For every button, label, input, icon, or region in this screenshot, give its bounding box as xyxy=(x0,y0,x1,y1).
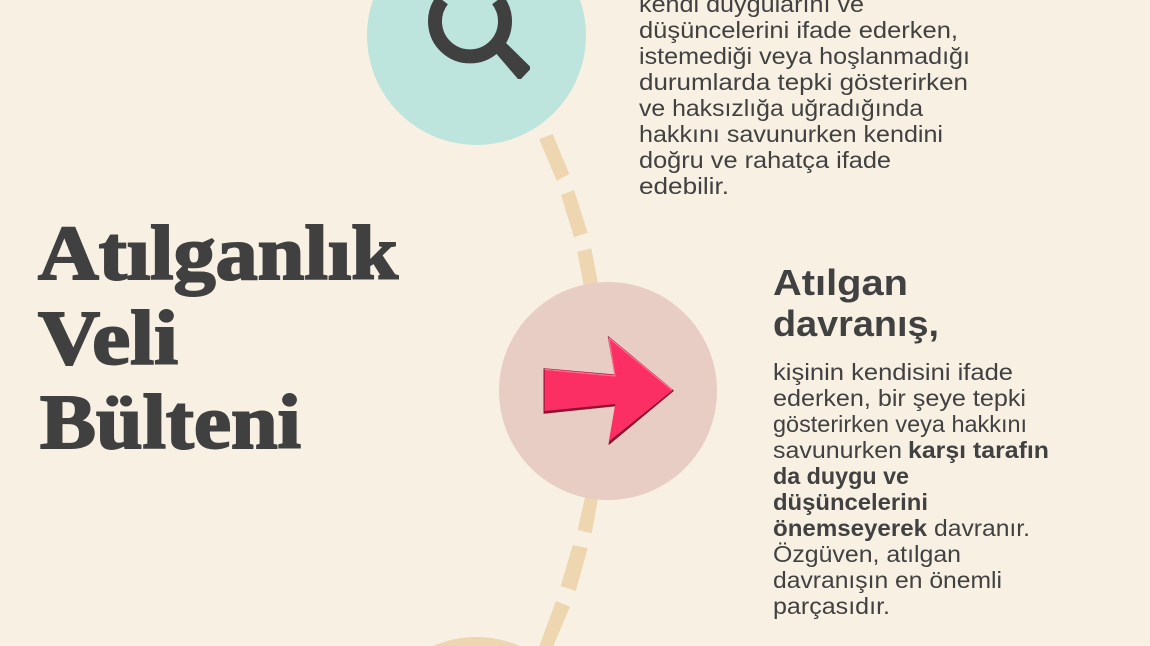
title: Veli xyxy=(38,295,178,381)
text block: top description xyxy=(639,0,970,199)
text block: assertive behaviour description: savunurken xyxy=(773,437,902,463)
text block: assertive behaviour description: davranışın en önemli xyxy=(773,567,1002,593)
text block: top description: durumlarda tepki gösterirken xyxy=(639,69,968,95)
text block: assertive behaviour description: parçasıdır. xyxy=(773,593,890,619)
text block: assertive behaviour description: davranır. xyxy=(934,515,1030,541)
dashed path connecting circles xyxy=(539,134,598,646)
icon: magnifying glass xyxy=(435,0,530,79)
text block: assertive behaviour description: Özgüven, atılgan xyxy=(773,541,961,567)
circle: teal search step xyxy=(367,0,586,145)
circle: pink arrow step xyxy=(499,282,717,500)
text block: top description: düşüncelerini ifade ederken, xyxy=(639,17,958,43)
text block: assertive behaviour description: gösterirken veya hakkını xyxy=(773,411,1027,437)
text block: top description: ve haksızlığa uğradığında xyxy=(639,95,923,121)
circle: peach next step xyxy=(433,637,520,646)
title: Atılganlık xyxy=(38,210,398,296)
text block: top description: hakkını savunurken kendini xyxy=(639,121,943,147)
title: Bülteni xyxy=(40,379,301,465)
text block: assertive behaviour description: da duygu ve xyxy=(773,463,909,489)
heading: Atılgan davranış xyxy=(773,262,939,344)
text block: assertive behaviour description: kişinin kendisini ifade xyxy=(773,359,1013,385)
heading: Atılgan davranış: davranış, xyxy=(773,303,939,344)
text block: assertive behaviour description: ederken, bir şeye tepki xyxy=(773,385,1026,411)
icon: pink arrow xyxy=(544,337,673,444)
title xyxy=(38,210,398,465)
text block: top description: istemediği veya hoşlanmadığı xyxy=(639,43,970,69)
text block: assertive behaviour description: karşı tarafın xyxy=(908,437,1049,463)
text block: assertive behaviour description: önemseyerek xyxy=(773,515,927,541)
text block: assertive behaviour description xyxy=(773,359,1049,619)
heading: Atılgan davranış: Atılgan xyxy=(773,262,908,303)
text block: top description: edebilir. xyxy=(639,173,729,199)
text block: assertive behaviour description: düşüncelerini xyxy=(773,489,928,515)
text block: top description: doğru ve rahatça ifade xyxy=(639,147,891,173)
